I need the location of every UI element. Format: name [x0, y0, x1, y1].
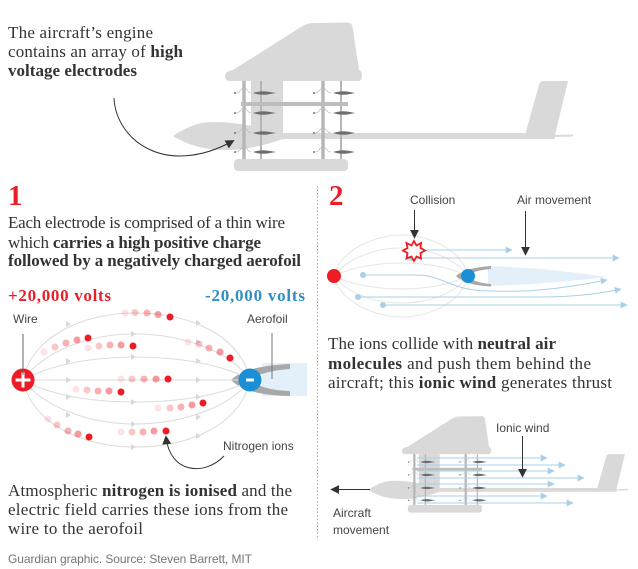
- text: ionisation description: Atmospheric nitrogen is ionised and the: [8, 481, 292, 500]
- arrow: ionic wind: [522, 436, 524, 476]
- divider: [316, 186, 318, 540]
- label: aerofoil: Aerofoil: [247, 312, 288, 326]
- label: collision: Collision: [410, 193, 455, 207]
- text: ionic wind description: [328, 334, 612, 392]
- intro text: [8, 23, 184, 80]
- text: electrode description: [8, 213, 301, 270]
- ionic wind arrows: [417, 458, 584, 503]
- label: aircraft movement: movement: [333, 523, 390, 537]
- illustration: aircraft with ionic wind: [368, 416, 628, 513]
- label: ionic wind: Ionic wind: [496, 421, 549, 435]
- wire: positive charge: [12, 368, 34, 392]
- aerofoil: [231, 363, 307, 396]
- text: electrode description: which carries a high positive charge: [8, 233, 261, 252]
- text: electrode description: Each electrode is comprised of a thin wire: [8, 213, 285, 232]
- heading: step 1: 1: [8, 180, 22, 212]
- arrow: aircraft movement: [332, 488, 370, 490]
- arrow: intro text to electrodes: [114, 98, 233, 156]
- air movement arrows: [358, 250, 627, 305]
- illustration: aircraft side view: [173, 22, 573, 171]
- arrow: nitrogen ions: [166, 437, 224, 469]
- arrow: air movement: [524, 211, 526, 254]
- diagram: collision and air movement: [327, 235, 627, 317]
- field arrowheads: [66, 320, 201, 450]
- heading: step 2: 2: [329, 180, 344, 212]
- field lines: [23, 313, 250, 447]
- nitrogen ion trails: [40, 309, 234, 440]
- aerofoil: [456, 266, 607, 286]
- aerofoil electrode: negative charge: [238, 368, 262, 392]
- wire: [327, 269, 341, 283]
- text: ionic wind description: aircraft; this ionic wind generates thrust: [328, 373, 612, 392]
- intro text: The aircraft’s engine: [8, 23, 153, 42]
- text: ionisation description: electric field carries these ions from the: [8, 500, 288, 519]
- label: air movement: Air movement: [517, 193, 592, 207]
- intro text: contains an array of high: [8, 42, 184, 61]
- intro text: voltage electrodes: [8, 61, 137, 80]
- diagram: electric field and nitrogen ions: [12, 309, 307, 450]
- label: wire: Wire: [13, 312, 38, 326]
- icon: collision star: [403, 241, 425, 261]
- text: electrode description: followed by a negatively charged aerofoil: [8, 251, 301, 270]
- label: nitrogen ions: Nitrogen ions: [223, 439, 294, 453]
- text: ionic wind description: The ions collide with neutral air: [328, 334, 556, 353]
- label: positive voltage: +20,000 volts: [8, 286, 111, 305]
- air particles: [355, 247, 424, 308]
- label: aircraft movement: [333, 506, 390, 537]
- label: negative voltage: -20,000 volts: [205, 286, 305, 305]
- arrow: collision: [414, 210, 416, 237]
- faint field lines: [334, 235, 468, 317]
- text: ionic wind description: molecules and push them behind the: [328, 354, 591, 373]
- source: Guardian graphic. Source: Steven Barrett, MIT: [8, 552, 253, 566]
- text: ionisation description: [8, 481, 292, 538]
- aerofoil electrode: [461, 269, 475, 283]
- label: aircraft movement: Aircraft: [333, 506, 372, 520]
- text: ionisation description: wire to the aerofoil: [8, 519, 143, 538]
